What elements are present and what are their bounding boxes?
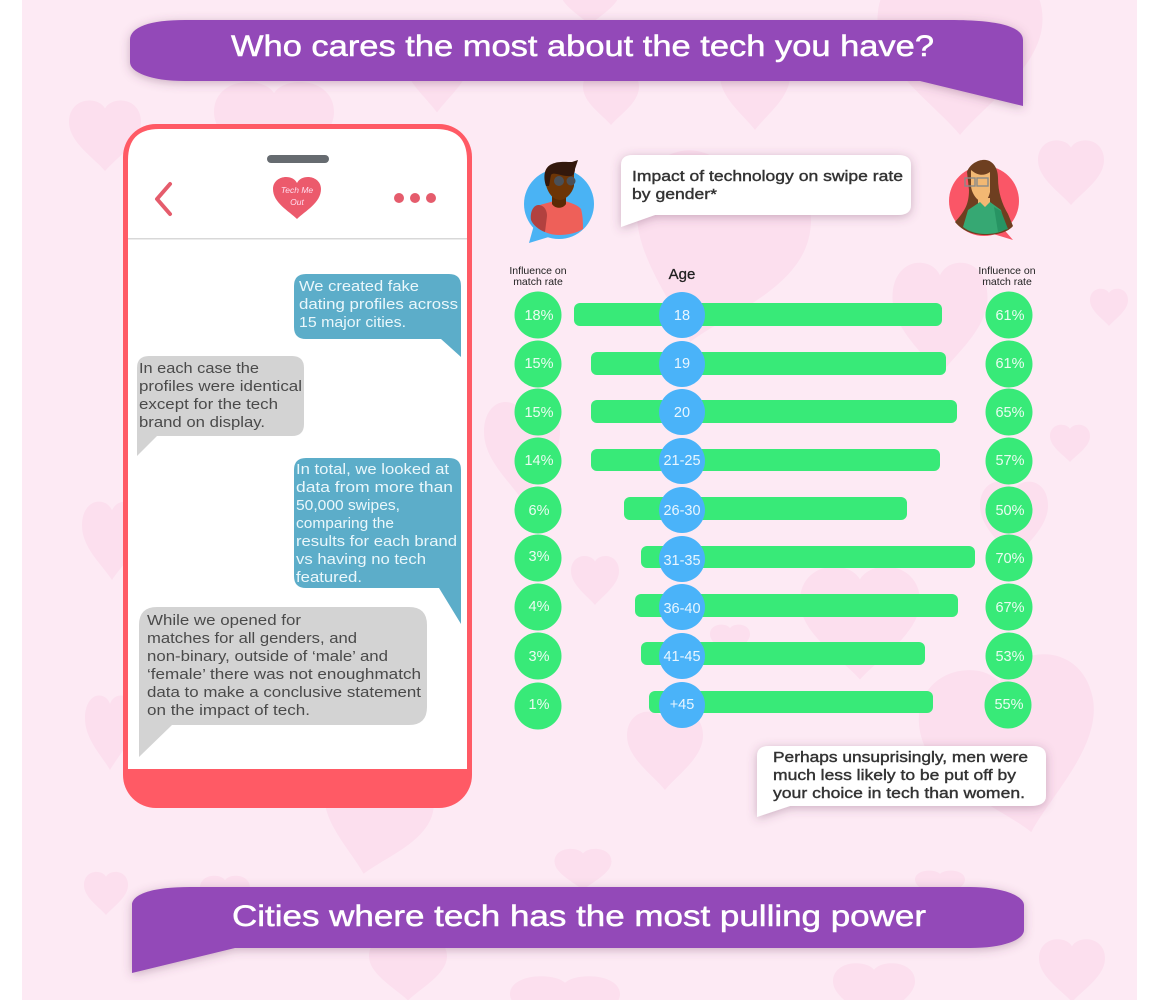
row 36-40: 36-40 bbox=[663, 601, 701, 617]
row 20: 20 bbox=[674, 405, 690, 421]
row 31-35: 70% bbox=[995, 551, 1025, 567]
callout: men less likely: Perhaps unsuprisingly, men were bbox=[773, 749, 1028, 766]
message: fake profiles: dating profiles across bbox=[299, 296, 458, 313]
row 19: 19 bbox=[674, 356, 690, 372]
message: 50,000 swipes: results for each brand bbox=[296, 533, 457, 550]
row 26-30: 26-30 bbox=[663, 503, 701, 519]
message: genders: matches for all genders, and bbox=[147, 630, 357, 647]
bottom banner bbox=[132, 887, 1024, 973]
row 21-25: 14% bbox=[524, 453, 554, 469]
row 20 bbox=[514, 388, 1032, 436]
row 26-30 bbox=[514, 486, 1032, 534]
callout: chart heading bbox=[621, 155, 911, 227]
message: fake profiles: 15 major cities. bbox=[299, 314, 406, 331]
row 41-45 bbox=[514, 632, 1032, 680]
row 18: 18% bbox=[524, 308, 554, 324]
row 45 plus: 1% bbox=[529, 697, 550, 713]
logo heart: Tech Me bbox=[281, 185, 313, 195]
phone bbox=[123, 124, 472, 808]
column label: women influence: Influence on bbox=[978, 265, 1036, 277]
message: 50,000 swipes: data from more than bbox=[296, 479, 453, 496]
row 20: 65% bbox=[995, 405, 1025, 421]
row 36-40: 67% bbox=[995, 600, 1025, 616]
row 26-30: 50% bbox=[995, 503, 1025, 519]
row 31-35: 31-35 bbox=[663, 553, 701, 569]
message: 50,000 swipes bbox=[294, 458, 461, 624]
row 45 plus: +45 bbox=[670, 697, 694, 713]
row 21-25: 57% bbox=[995, 453, 1025, 469]
callout: chart heading: by gender* bbox=[632, 186, 717, 203]
menu dots bbox=[394, 193, 436, 203]
chart: swipe rate by age bbox=[514, 292, 1032, 730]
message: identical profiles: In each case the bbox=[139, 360, 259, 377]
message: 50,000 swipes: 50,000 swipes, bbox=[296, 497, 400, 514]
row 19: 15% bbox=[524, 356, 554, 372]
row 19: 61% bbox=[995, 356, 1025, 372]
message: 50,000 swipes: comparing the bbox=[296, 515, 394, 532]
row 18 bbox=[514, 292, 1032, 338]
row 26-30: 6% bbox=[529, 503, 550, 519]
message: genders: While we opened for bbox=[147, 612, 301, 629]
message: 50,000 swipes: vs having no tech bbox=[296, 551, 426, 568]
row 36-40: 4% bbox=[529, 599, 550, 615]
row 31-35: 3% bbox=[529, 549, 550, 565]
back arrow bbox=[157, 184, 170, 214]
row 21-25: 21-25 bbox=[663, 453, 701, 469]
icon: woman avatar bbox=[949, 160, 1019, 240]
icon: man avatar bbox=[524, 160, 594, 243]
logo heart bbox=[273, 177, 321, 219]
title text: Who cares the most about the tech you have? bbox=[231, 30, 934, 63]
row 36-40 bbox=[514, 584, 1032, 630]
row 45 plus: 55% bbox=[994, 697, 1024, 713]
row 45 plus bbox=[514, 682, 1032, 730]
row 41-45: 41-45 bbox=[663, 649, 701, 665]
message: genders: ‘female’ there was not enoughmatch bbox=[147, 666, 421, 683]
column label: men influence: Influence on bbox=[509, 265, 567, 277]
message: 50,000 swipes: featured. bbox=[296, 569, 362, 586]
row 21-25 bbox=[514, 438, 1032, 484]
phone speaker bbox=[267, 155, 329, 163]
message: fake profiles bbox=[294, 274, 461, 357]
callout: men less likely: your choice in tech than women. bbox=[773, 785, 1025, 802]
message: identical profiles: except for the tech bbox=[139, 396, 278, 413]
row 41-45: 3% bbox=[529, 649, 550, 665]
message: genders: non-binary, outside of ‘male’ and bbox=[147, 648, 388, 665]
message: genders bbox=[139, 607, 427, 757]
row 41-45: 53% bbox=[995, 649, 1025, 665]
column label: women influence: match rate bbox=[982, 276, 1032, 288]
message: fake profiles: We created fake bbox=[299, 278, 419, 295]
message: identical profiles: profiles were identical bbox=[139, 378, 302, 395]
row 20: 15% bbox=[524, 405, 554, 421]
message: 50,000 swipes: In total, we looked at bbox=[296, 461, 450, 478]
logo heart: Out bbox=[290, 197, 304, 207]
message: genders: data to make a conclusive statement bbox=[147, 684, 422, 701]
row 18: 61% bbox=[995, 308, 1025, 324]
message: genders: on the impact of tech. bbox=[147, 702, 310, 719]
message: identical profiles: brand on display. bbox=[139, 414, 265, 431]
callout: men less likely: much less likely to be put off by bbox=[773, 767, 1017, 784]
callout: chart heading: Impact of technology on swipe rate bbox=[632, 168, 903, 185]
column label: men influence: match rate bbox=[513, 276, 563, 288]
column label: age: Age bbox=[669, 266, 695, 283]
message: identical profiles bbox=[137, 356, 304, 456]
bottom banner text: Cities where tech has the most pulling power bbox=[232, 900, 926, 933]
row 31-35 bbox=[514, 534, 1032, 582]
title banner bbox=[130, 20, 1023, 106]
callout: men less likely bbox=[757, 746, 1046, 817]
row 18: 18 bbox=[674, 308, 690, 324]
row 19 bbox=[514, 340, 1032, 388]
